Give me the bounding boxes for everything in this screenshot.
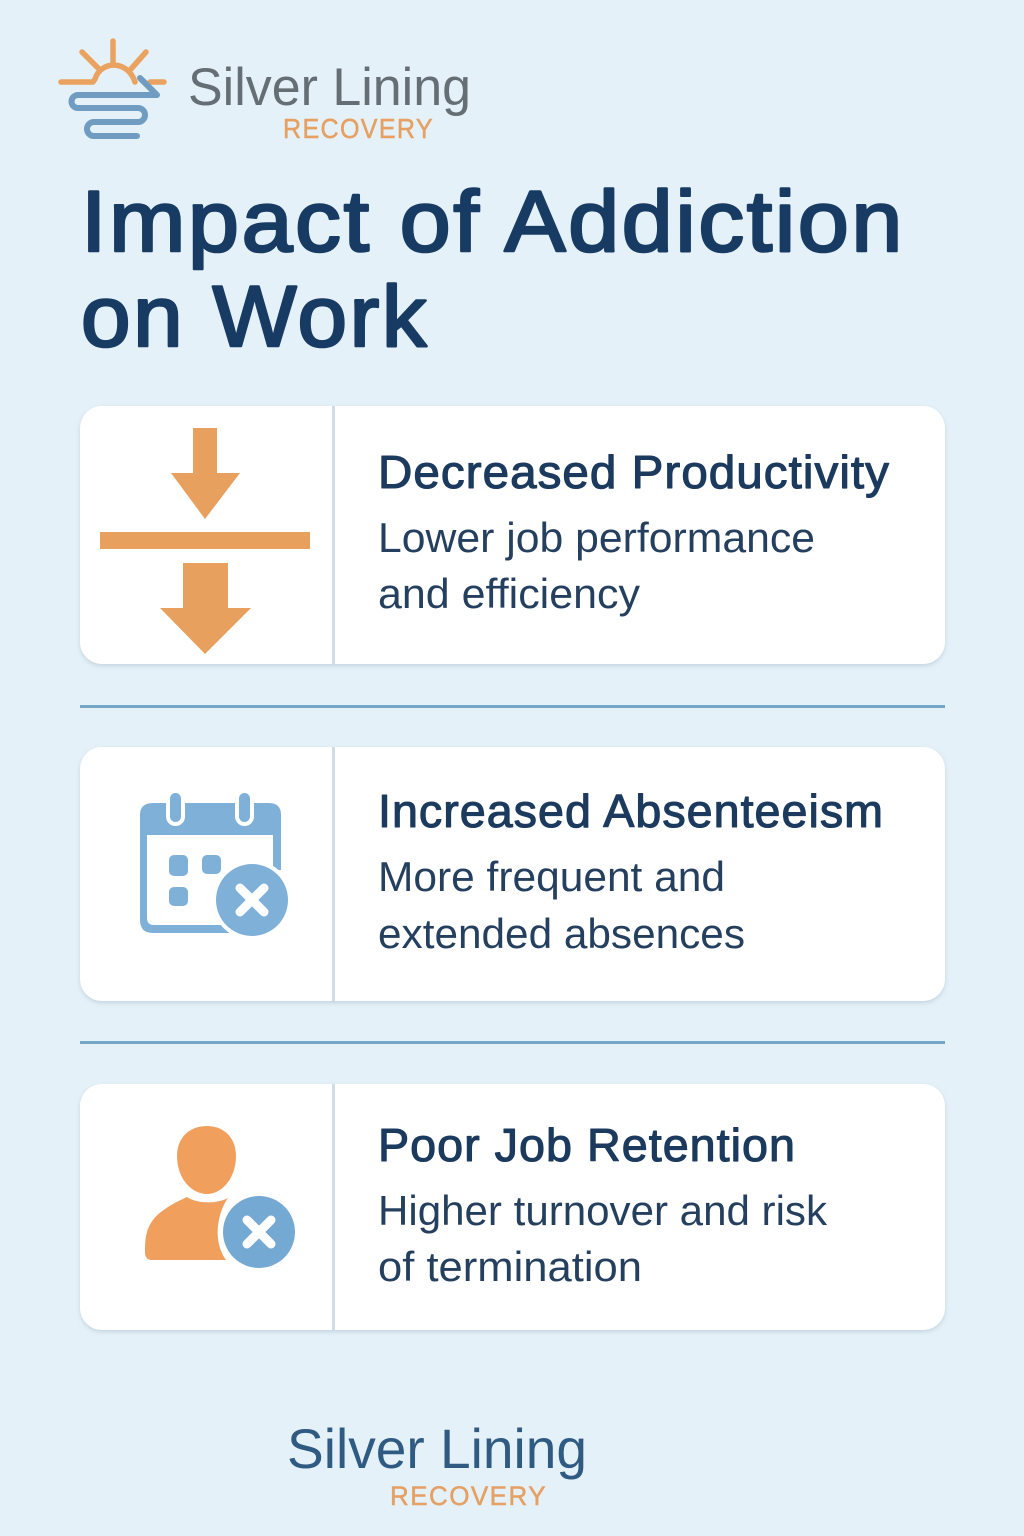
icon: down arrows with line [100, 428, 310, 654]
description: and efficiency [378, 570, 640, 617]
icon: sun over winding river [61, 41, 164, 136]
heading: Decreased Productivity [378, 446, 890, 498]
heading: Increased Absenteeism [378, 785, 884, 837]
icon: person with x [145, 1126, 295, 1268]
title [81, 174, 905, 365]
description: More frequent and [378, 853, 725, 900]
description: Higher turnover and risk [378, 1187, 828, 1234]
footer logo: Silver Lining [287, 1417, 587, 1480]
title: Impact of Addiction [81, 174, 905, 270]
panel: increased absenteeism [80, 747, 945, 1001]
description [378, 1187, 828, 1290]
footer logo: RECOVERY [390, 1481, 547, 1511]
footer logo [287, 1417, 587, 1511]
description: of termination [378, 1243, 642, 1290]
divider [80, 1041, 945, 1044]
divider [80, 705, 945, 708]
logo tagline: RECOVERY [283, 113, 434, 144]
description: extended absences [378, 910, 745, 957]
icon: calendar with x [140, 793, 288, 936]
description [378, 514, 815, 617]
panel: decreased productivity [80, 406, 945, 664]
description: Lower job performance [378, 514, 815, 561]
description [378, 853, 745, 957]
heading: Poor Job Retention [378, 1119, 796, 1171]
header logo [61, 41, 471, 144]
title: on Work [81, 269, 429, 365]
panel: poor job retention [80, 1084, 945, 1330]
logo name: Silver Lining [188, 58, 471, 117]
